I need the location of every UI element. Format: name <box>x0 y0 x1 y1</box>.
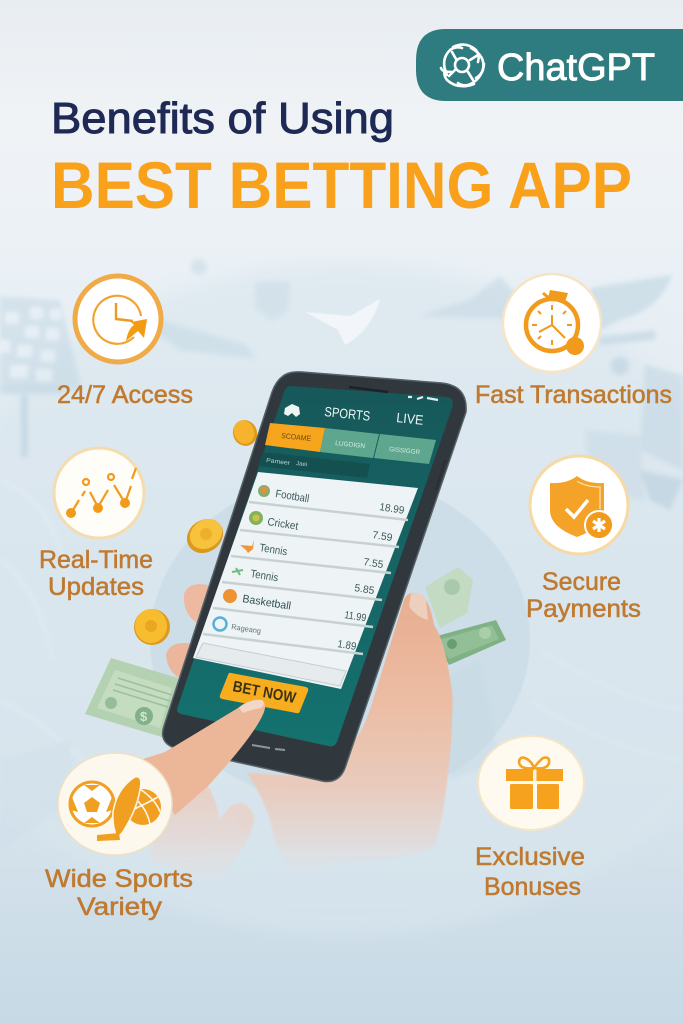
benefit: real-time updates <box>39 448 153 601</box>
label line one: Real-Time <box>39 546 153 574</box>
row: tennis second: Tennis <box>250 568 279 584</box>
row: regional: Rageang <box>231 622 262 636</box>
left hand lower finger <box>178 803 254 888</box>
phone <box>163 372 466 782</box>
nav: live: LIVE <box>396 410 424 428</box>
row: tennis second <box>232 568 375 597</box>
benefit: fast transactions <box>475 274 672 409</box>
row: regional: 1.89 <box>337 638 357 653</box>
right hand palm <box>247 663 453 875</box>
icon: gift box <box>478 736 584 830</box>
row: tennis: 7.55 <box>363 556 384 571</box>
label: Fast Transactions <box>475 381 672 409</box>
row: cricket <box>249 511 393 544</box>
row: football <box>258 485 405 517</box>
tab: third: GISSIGGR <box>389 446 421 456</box>
icon: white bird <box>305 299 380 345</box>
row: tennis: Tennis <box>259 542 288 558</box>
row: football: Football <box>275 488 310 505</box>
row: basketball: 11.99 <box>344 609 367 624</box>
bet now button <box>220 673 308 713</box>
benefit: 24/7 access <box>57 276 193 409</box>
row: football: 18.99 <box>379 501 405 517</box>
coins <box>134 417 261 645</box>
faded plane and scenery right <box>125 259 683 780</box>
label: 24/7 Access <box>57 381 193 409</box>
row: tennis second: 5.85 <box>354 582 375 597</box>
left hand fingers behind phone <box>166 584 218 680</box>
row: basketball <box>223 589 367 624</box>
text: ChatGPT: ChatGPT <box>497 47 655 89</box>
search row: Pameer <box>266 458 290 467</box>
coin middle <box>180 512 230 560</box>
row separators <box>203 502 408 654</box>
row: basketball: Basketball <box>242 593 292 613</box>
icon: line chart <box>54 448 144 538</box>
label line one: Wide Sports <box>45 865 193 893</box>
row: cricket: 7.59 <box>372 529 393 544</box>
row: cricket: Cricket <box>267 516 299 533</box>
bottom bar marker <box>252 745 285 750</box>
benefit: wide sports variety <box>45 753 193 921</box>
app logo <box>284 404 300 417</box>
left hand web below thumb <box>150 760 219 872</box>
money right <box>425 567 506 665</box>
heading line one: Benefits of Using <box>51 94 394 143</box>
search row <box>258 452 370 478</box>
benefit: exclusive bonuses <box>475 736 585 901</box>
badge: ChatGPT <box>416 29 683 101</box>
faded stadium scenery left <box>0 296 120 850</box>
screen <box>177 386 453 746</box>
coin top <box>229 417 261 449</box>
icon: clock with arrow <box>75 276 161 362</box>
coin lower <box>134 609 170 645</box>
icon: sports balls <box>58 753 172 855</box>
icon: shield <box>530 456 628 554</box>
label line two: Payments <box>526 595 641 623</box>
list panel <box>193 472 418 689</box>
status icons <box>408 397 438 400</box>
fingernail right <box>409 593 428 620</box>
heading line two: BEST BETTING APP <box>51 148 632 222</box>
row: tennis <box>240 540 384 571</box>
label line two: Bonuses <box>484 873 581 901</box>
tab: orange <box>265 423 325 452</box>
right hand finger over phone <box>345 593 452 772</box>
search row: Jaei <box>296 461 307 468</box>
money left <box>85 658 178 738</box>
label line two: Updates <box>48 573 144 601</box>
label line one: Secure <box>542 568 621 596</box>
icon: stopwatch <box>503 274 601 372</box>
row: regional <box>214 618 357 653</box>
money left: $ <box>140 709 148 724</box>
icon: ChatGPT logo <box>441 45 484 86</box>
tab: third <box>374 434 436 464</box>
tab: second <box>320 428 379 458</box>
tab: second: LUGDIGN <box>335 440 366 450</box>
title <box>51 94 632 222</box>
speaker <box>349 387 388 392</box>
label line two: Variety <box>77 893 163 921</box>
bet now button: BET NOW <box>231 678 298 707</box>
phone body <box>163 372 466 782</box>
nav: sports: SPORTS <box>324 404 371 424</box>
label line one: Exclusive <box>475 843 585 871</box>
filter bar <box>196 643 346 686</box>
phone side button <box>436 460 445 490</box>
tab: orange: SCOAME <box>281 431 312 443</box>
benefit: secure payments <box>526 456 641 623</box>
left thumb on button <box>140 700 265 815</box>
